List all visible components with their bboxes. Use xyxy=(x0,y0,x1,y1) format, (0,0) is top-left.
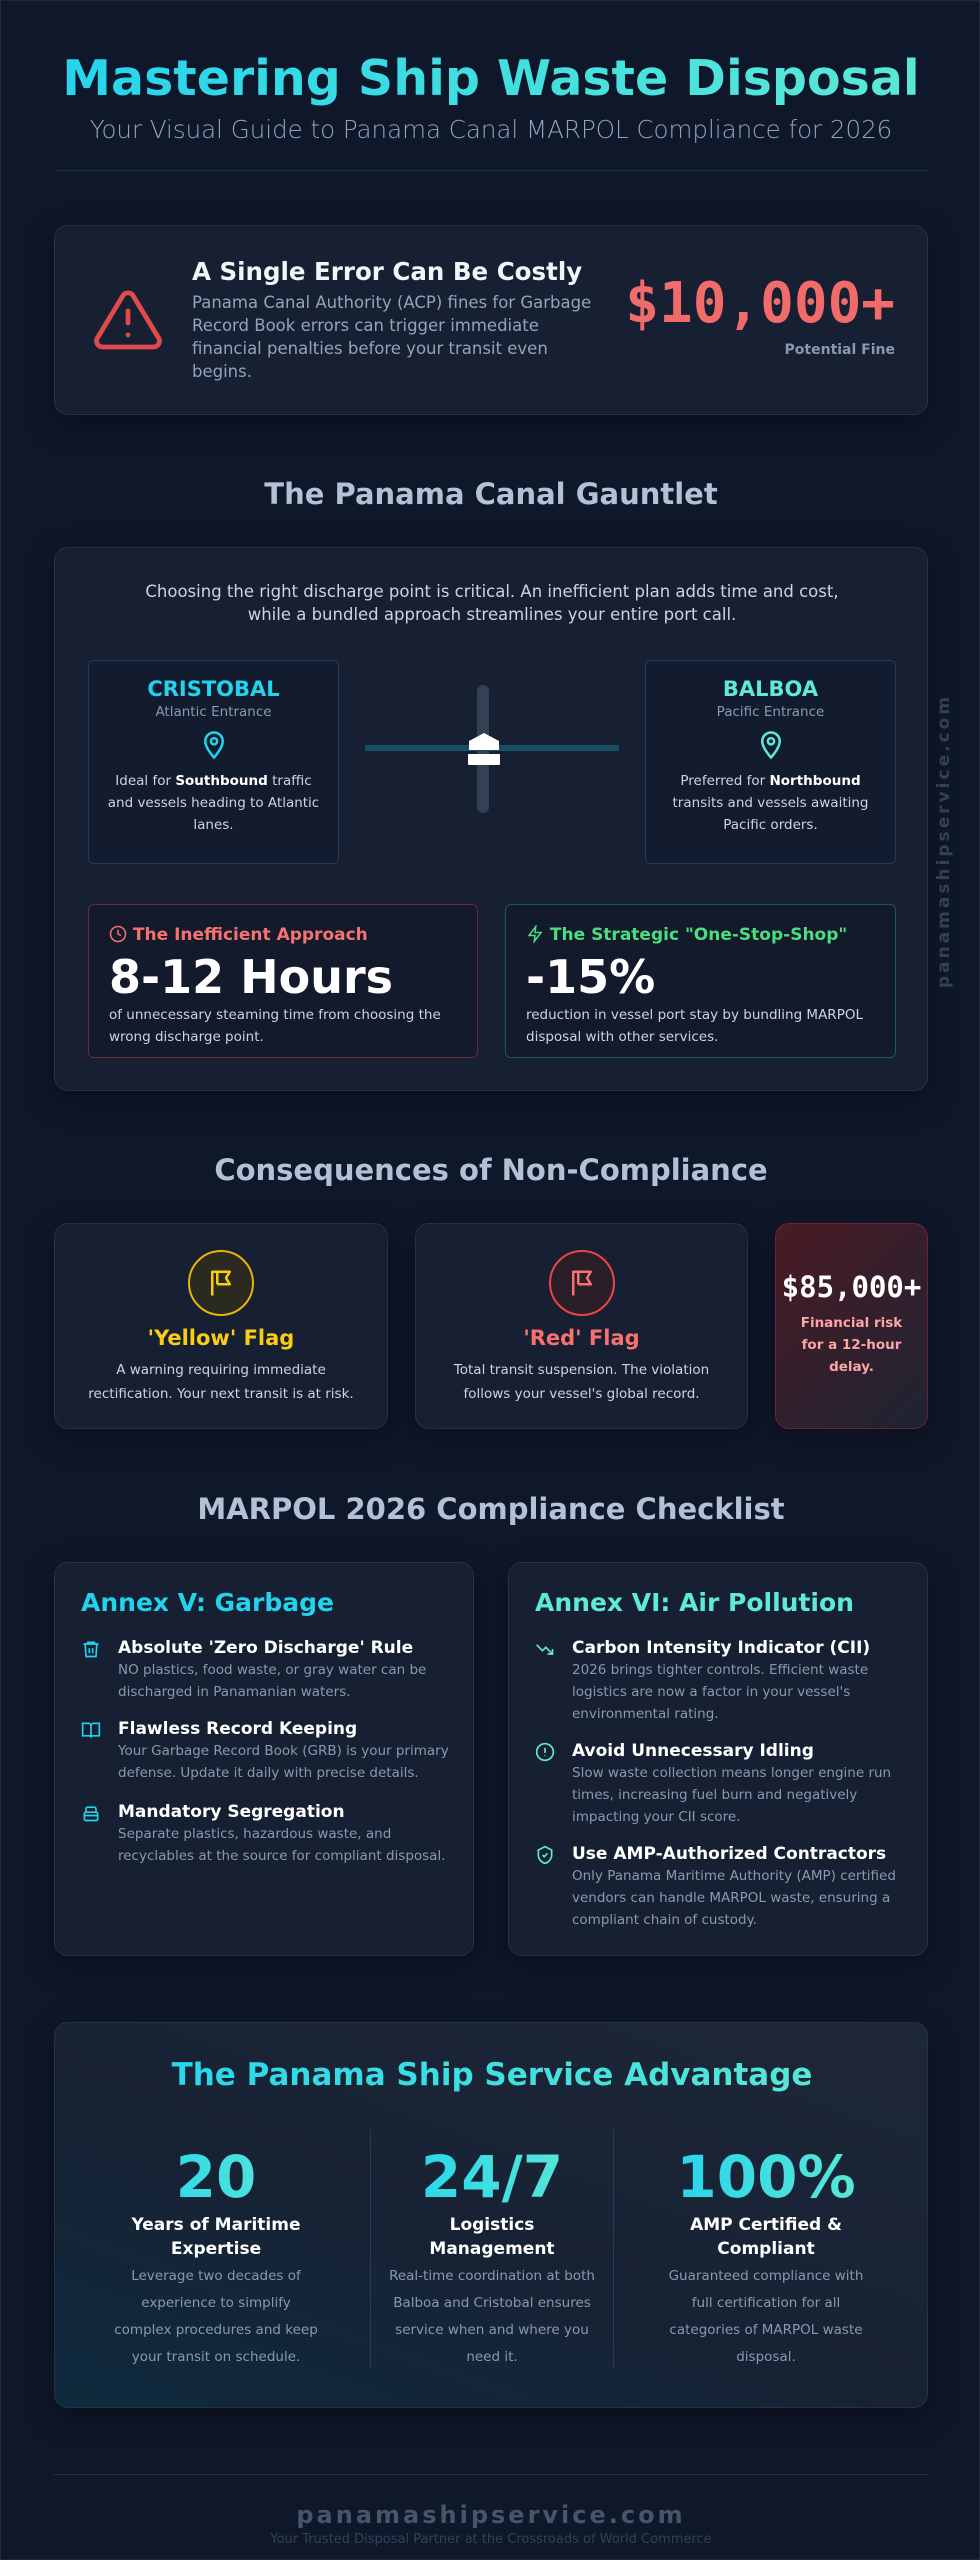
icon: warning xyxy=(94,290,162,350)
item: idling: Slow waste collection means longer engine run times, increasing fuel burn and negatively impacting your CII score. xyxy=(572,1765,891,1825)
panel: annex vi: Annex VI: Air Pollution xyxy=(535,1588,854,1617)
stat: 24/7: Management xyxy=(429,2239,555,2259)
stat: 20 years: Leverage two decades of experience to simplify complex procedures and keep your transit on schedule. xyxy=(114,2268,318,2365)
panel: advantage xyxy=(54,2022,928,2408)
panel: strategic: -15% xyxy=(526,950,655,1004)
stat: 20 years: Years of Maritime xyxy=(132,2215,300,2235)
panel: inefficient: 8-12 Hours xyxy=(109,950,393,1004)
footer: panamashipservice.com xyxy=(296,2501,686,2529)
item: cii: 2026 brings tighter controls. Efficient waste logistics are now a factor in your vessel's environmental rating. xyxy=(572,1662,868,1722)
panel: annex vi xyxy=(508,1562,928,1956)
canal diagram xyxy=(365,685,619,813)
panel: cristobal: Ideal for Southbound traffic and vessels heading to Atlantic lanes. xyxy=(108,773,319,833)
item: record keeping xyxy=(82,1719,449,1781)
panel: yellow flag: 'Yellow' Flag xyxy=(148,1326,294,1350)
stat: 24/7: Real-time coordination at both Balboa and Cristobal ensures service when and where you need it. xyxy=(389,2268,595,2365)
heading: consequences: Consequences of Non-Compliance xyxy=(214,1153,768,1187)
panel: inefficient: The Inefficient Approach xyxy=(133,925,368,945)
item: segregation xyxy=(84,1802,446,1864)
panel: balboa: Pacific Entrance xyxy=(717,704,824,720)
panel: strategic: The Strategic "One-Stop-Shop" xyxy=(550,925,847,945)
icon: ship xyxy=(468,733,500,765)
item: segregation: Separate plastics, hazardous waste, and recyclables at the source for compliant disposal. xyxy=(118,1826,446,1864)
panel: financial risk: $85,000+ xyxy=(782,1270,921,1304)
intro text xyxy=(145,582,839,624)
icon: red flag xyxy=(548,1250,614,1316)
panel: alert xyxy=(54,225,928,415)
stat: 100%: Guaranteed compliance with full certification for all categories of MARPOL waste disposal. xyxy=(669,2268,863,2365)
icon: yellow flag xyxy=(188,1250,254,1316)
item: amp contractors: Only Panama Maritime Authority (AMP) certified vendors can handle MARPOL waste, ensuring a compliant chain of custody. xyxy=(572,1868,896,1928)
title: Mastering Ship Waste Disposal xyxy=(62,50,920,107)
intro text: while a bundled approach streamlines your entire port call. xyxy=(248,605,736,624)
panel: annex v xyxy=(54,1562,474,1956)
panel: cristobal: Atlantic Entrance xyxy=(155,704,272,720)
stat: 100%: Compliant xyxy=(717,2239,815,2259)
stat: 20 years: Expertise xyxy=(171,2239,261,2259)
stat: 20 years xyxy=(114,2143,318,2365)
intro text: Choosing the right discharge point is critical. An inefficient plan adds time and cost, xyxy=(145,582,839,601)
item: segregation: Mandatory Segregation xyxy=(118,1802,345,1822)
icon: clock xyxy=(110,926,126,942)
panel: annex v: Annex V: Garbage xyxy=(81,1588,334,1617)
item: idling: Avoid Unnecessary Idling xyxy=(572,1741,814,1761)
stat: fine: $10,000+ xyxy=(625,271,895,336)
panel: red flag: Total transit suspension. The violation follows your vessel's global record. xyxy=(454,1362,709,1402)
panel: red flag: 'Red' Flag xyxy=(523,1326,640,1350)
panel: financial risk: Financial risk for a 12-hour delay. xyxy=(801,1315,902,1375)
heading: checklist: MARPOL 2026 Compliance Checklist xyxy=(197,1492,785,1526)
panel: financial risk xyxy=(775,1223,928,1429)
icon: pin xyxy=(761,731,781,760)
icon: bolt xyxy=(528,925,542,943)
panel: strategic xyxy=(505,904,896,1058)
panel: cristobal: CRISTOBAL xyxy=(147,677,280,701)
item: zero discharge: NO plastics, food waste, or gray water can be discharged in Panamanian waters. xyxy=(118,1662,426,1700)
item: record keeping: Your Garbage Record Book (GRB) is your primary defense. Update it daily with precise details. xyxy=(118,1743,449,1781)
heading: The Panama Ship Service Advantage xyxy=(172,2057,812,2093)
item: idling xyxy=(536,1741,891,1825)
panel: red flag xyxy=(415,1223,748,1429)
stat: 24/7: Logistics xyxy=(450,2215,534,2235)
item: record keeping: Flawless Record Keeping xyxy=(118,1719,357,1739)
item: cii xyxy=(536,1638,870,1722)
subtitle: Your Visual Guide to Panama Canal MARPOL Compliance for 2026 xyxy=(90,115,892,144)
stat: 24/7 xyxy=(389,2143,595,2365)
stat: fine: Potential Fine xyxy=(785,342,895,358)
stat: 100%: 100% xyxy=(676,2143,856,2211)
item: amp contractors xyxy=(538,1844,896,1928)
heading: gauntlet: The Panama Canal Gauntlet xyxy=(264,477,718,511)
stat: 24/7: 24/7 xyxy=(421,2143,563,2211)
item: zero discharge: Absolute 'Zero Discharge' Rule xyxy=(118,1638,413,1658)
stat: 20 years: 20 xyxy=(176,2143,256,2211)
panel: strategic: reduction in vessel port stay by bundling MARPOL disposal with other services. xyxy=(526,1007,863,1045)
panel: balboa xyxy=(645,660,896,864)
panel: yellow flag xyxy=(54,1223,388,1429)
stat: 100%: AMP Certified & xyxy=(690,2215,842,2235)
item: zero discharge xyxy=(84,1638,426,1700)
panel: cristobal xyxy=(88,660,339,864)
stat: 100% xyxy=(669,2143,863,2365)
panel: inefficient: of unnecessary steaming time from choosing the wrong discharge point. xyxy=(109,1007,441,1045)
panel: balboa: Preferred for Northbound transits and vessels awaiting Pacific orders. xyxy=(672,773,868,833)
watermark vertical: panamashipservice.com xyxy=(934,694,954,988)
panel: inefficient xyxy=(88,904,478,1058)
heading: A Single Error Can Be Costly xyxy=(192,257,582,286)
footer xyxy=(270,2501,712,2547)
item: amp contractors: Use AMP-Authorized Contractors xyxy=(572,1844,886,1864)
panel: balboa: BALBOA xyxy=(723,677,818,701)
text block: Panama Canal Authority (ACP) fines for Garbage Record Book errors can trigger immediate financial penalties before your transit even begins. xyxy=(192,293,591,381)
item: cii: Carbon Intensity Indicator (CII) xyxy=(572,1638,870,1658)
icon: pin xyxy=(204,731,224,760)
panel: gauntlet xyxy=(54,547,928,1091)
panel: yellow flag: A warning requiring immediate rectification. Your next transit is at risk. xyxy=(88,1362,354,1402)
footer: Your Trusted Disposal Partner at the Crossroads of World Commerce xyxy=(270,2532,712,2547)
